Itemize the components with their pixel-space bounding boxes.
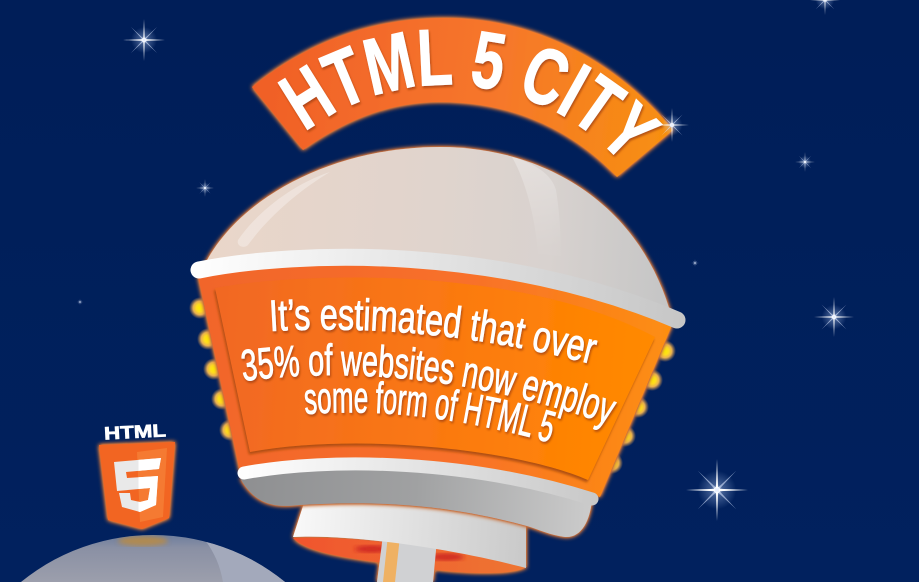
dome	[203, 147, 672, 318]
orange inner panel	[215, 277, 655, 480]
statistic text: some form of HTML 5	[304, 380, 558, 445]
bottom rim	[244, 464, 592, 499]
white collar	[293, 502, 526, 568]
red underside of collar	[293, 538, 527, 573]
planet dome lower left	[21, 535, 285, 582]
collar under sign	[293, 502, 527, 582]
HTML5 shield	[99, 442, 175, 529]
dome left highlight	[238, 172, 330, 247]
top rim	[199, 257, 677, 320]
star field	[76, 0, 854, 521]
dome right highlight	[512, 157, 561, 256]
banner shape	[252, 18, 673, 177]
marquee lights	[189, 297, 676, 474]
sign panel	[190, 248, 686, 542]
statistic text: 35% of websites now employ	[241, 342, 618, 433]
title text: HTML 5 CITY	[278, 30, 664, 158]
HTML label: HTML	[104, 420, 166, 444]
orange outer panel	[198, 264, 672, 497]
title banner	[249, 14, 688, 180]
pole	[377, 535, 437, 582]
HTML5 logo	[99, 420, 175, 529]
icon: sparkle on banner tip	[655, 108, 689, 142]
statistic text: It’s estimated that over	[271, 298, 600, 366]
gray base	[240, 467, 592, 537]
statistic text	[241, 298, 618, 445]
